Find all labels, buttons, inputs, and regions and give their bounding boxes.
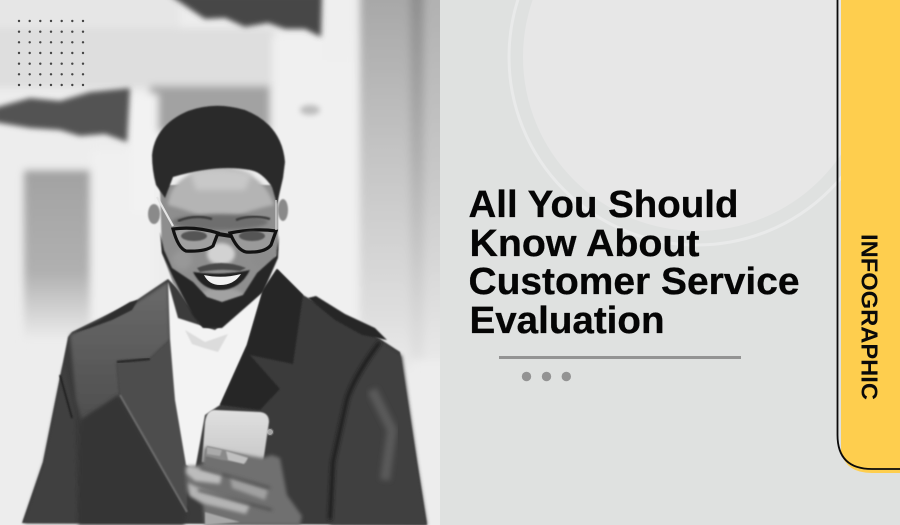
divider line	[499, 356, 741, 359]
glasses	[157, 197, 276, 252]
title: Evaluation	[470, 300, 664, 342]
left sleeve	[24, 365, 78, 523]
awnings	[0, 0, 322, 142]
decorative circle	[509, 0, 885, 245]
coat button	[266, 428, 274, 436]
three dots	[522, 372, 571, 381]
right lapel	[220, 269, 303, 410]
smile	[193, 270, 250, 290]
hand	[185, 446, 302, 525]
ears	[148, 204, 160, 224]
beard	[160, 232, 279, 328]
left chest	[68, 282, 170, 418]
coat	[22, 269, 427, 525]
title	[468, 184, 800, 342]
background photo	[0, 0, 450, 525]
title: Customer Service	[468, 261, 800, 303]
man	[22, 106, 427, 525]
head	[148, 106, 288, 328]
right sleeve	[330, 342, 427, 525]
title: Know About	[470, 223, 700, 265]
shirt	[168, 282, 263, 470]
pocket flap seam	[268, 446, 374, 448]
yellow side tab	[838, 0, 900, 473]
left lower body	[78, 395, 187, 525]
shoulder straps	[73, 300, 138, 333]
dot grid	[18, 20, 84, 86]
phone	[202, 410, 269, 470]
face	[159, 184, 279, 306]
left lapel	[117, 340, 187, 512]
right panel background	[440, 0, 900, 525]
brows	[178, 217, 270, 221]
hair	[152, 106, 285, 204]
title: All You Should	[468, 184, 738, 226]
tab label: INFOGRAPHIC	[856, 234, 882, 400]
